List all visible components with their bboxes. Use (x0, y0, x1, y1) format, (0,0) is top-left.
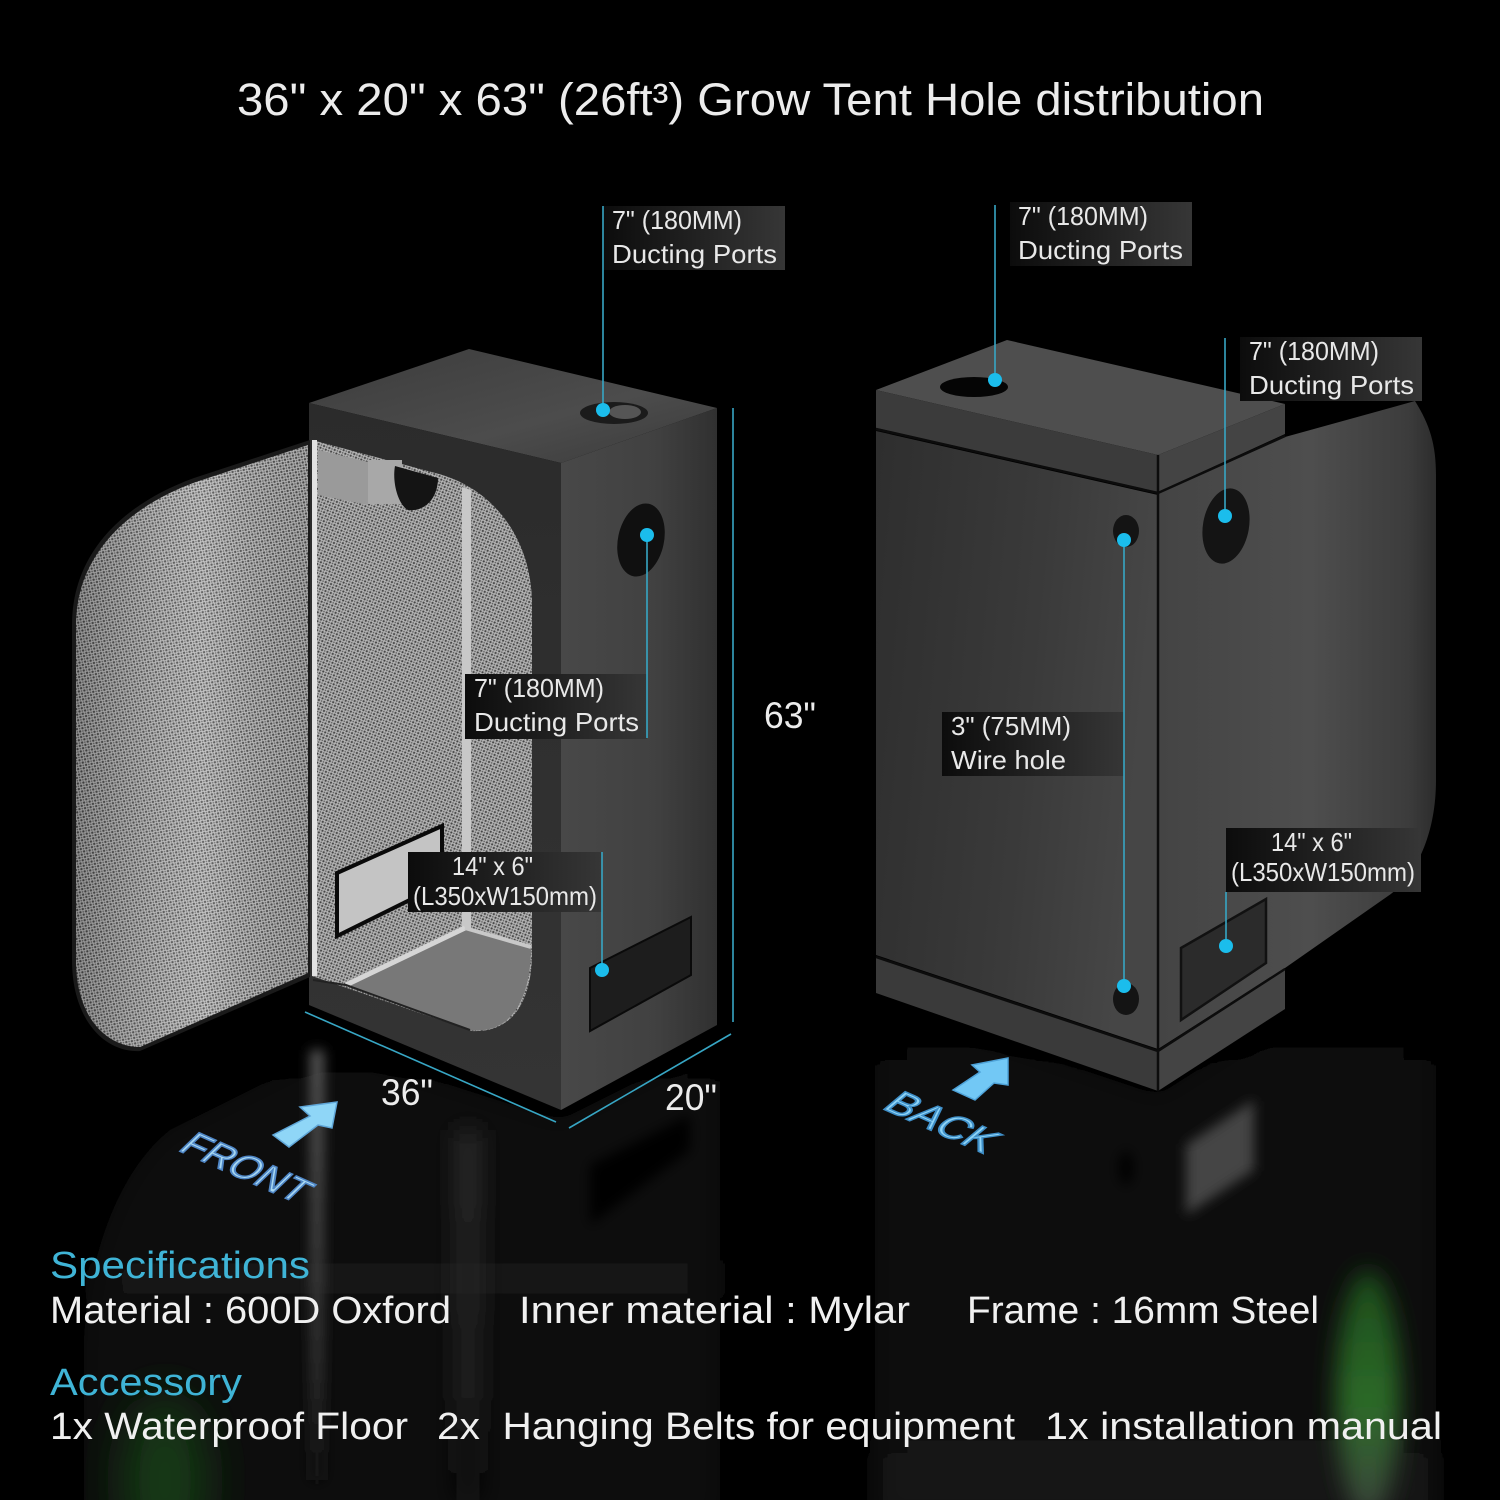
callout: front top port: Ducting Ports (612, 239, 777, 269)
title: 36" x 20" x 63" (26ft³) Grow Tent Hole distribution (237, 74, 1264, 125)
bottom band side (1158, 970, 1285, 1091)
door panel and side face (1158, 401, 1436, 1049)
top band front (876, 390, 1158, 492)
callout: back side port (1218, 336, 1422, 523)
floor reflection: front tent (84, 1040, 720, 1500)
seams (876, 429, 1285, 1091)
dimension: length: 36" (381, 1072, 433, 1113)
top vent (580, 402, 648, 424)
specifications list: Material : 600D Oxford (50, 1290, 451, 1332)
callout: back vent: 14" x 6" (1271, 827, 1352, 857)
accessory list: 2x Hanging Belts for equipment (437, 1406, 1015, 1448)
top face (876, 340, 1285, 455)
inside duct (318, 450, 438, 510)
accessory list: 1x installation manual (1045, 1406, 1442, 1448)
side face (561, 408, 717, 1110)
front face (309, 403, 561, 1110)
top face (309, 349, 717, 463)
bottom band front (876, 958, 1158, 1091)
dimension lines (305, 408, 733, 1128)
dimension: depth: 20" (665, 1077, 717, 1118)
accessory list (50, 1406, 1442, 1448)
top hole (940, 377, 1008, 397)
side slot (1181, 899, 1266, 1020)
specifications list: Inner material : Mylar (519, 1290, 910, 1332)
top band side (1158, 404, 1285, 492)
arrow: front (273, 1102, 337, 1147)
callout: back top port (988, 201, 1192, 387)
callout: back top port: Ducting Ports (1018, 235, 1183, 265)
callout: front side port: 7" (180MM) (474, 673, 604, 703)
callout: back side port: 7" (180MM) (1249, 336, 1379, 366)
side slot (590, 917, 691, 1031)
callout: back side port: Ducting Ports (1249, 370, 1414, 400)
dimension: height: 63" (764, 695, 816, 736)
back tent (876, 340, 1436, 1091)
callout: wire hole: Wire hole (951, 745, 1066, 775)
upper wire hole (1113, 515, 1139, 547)
callout: front top port: 7" (180MM) (612, 205, 742, 235)
callout: back vent: (L350xW150mm) (1231, 857, 1415, 887)
side port (1197, 485, 1255, 567)
callout: front vent: (L350xW150mm) (413, 881, 597, 911)
specifications list: Frame : 16mm Steel (967, 1290, 1319, 1332)
specifications heading: Specifications (50, 1245, 310, 1287)
back face (876, 431, 1158, 1049)
callout: wire hole (942, 533, 1131, 993)
callout: front side port: Ducting Ports (474, 707, 639, 737)
callout: front vent (408, 851, 609, 977)
callout: wire hole: 3" (75MM) (951, 711, 1071, 741)
front tent (72, 349, 717, 1110)
floor reflection: back tent (875, 975, 1436, 1500)
specifications list (50, 1290, 1319, 1332)
callout: front top port (596, 205, 785, 417)
accessory list: 1x Waterproof Floor (50, 1406, 408, 1448)
side vent port (611, 499, 671, 581)
callout: front side port (465, 528, 654, 739)
label: back: BACK (874, 1086, 1010, 1160)
arrow: back (953, 1058, 1008, 1100)
callout: back top port: 7" (180MM) (1018, 201, 1148, 231)
label: front: FRONT (171, 1126, 323, 1210)
inside vent window (337, 826, 442, 936)
lower wire hole (1113, 983, 1139, 1015)
callout: back vent (1219, 827, 1421, 953)
open door panel (72, 440, 310, 1051)
accessory heading: Accessory (50, 1362, 242, 1404)
callout: front vent: 14" x 6" (452, 851, 533, 881)
tent interior (312, 440, 532, 1031)
